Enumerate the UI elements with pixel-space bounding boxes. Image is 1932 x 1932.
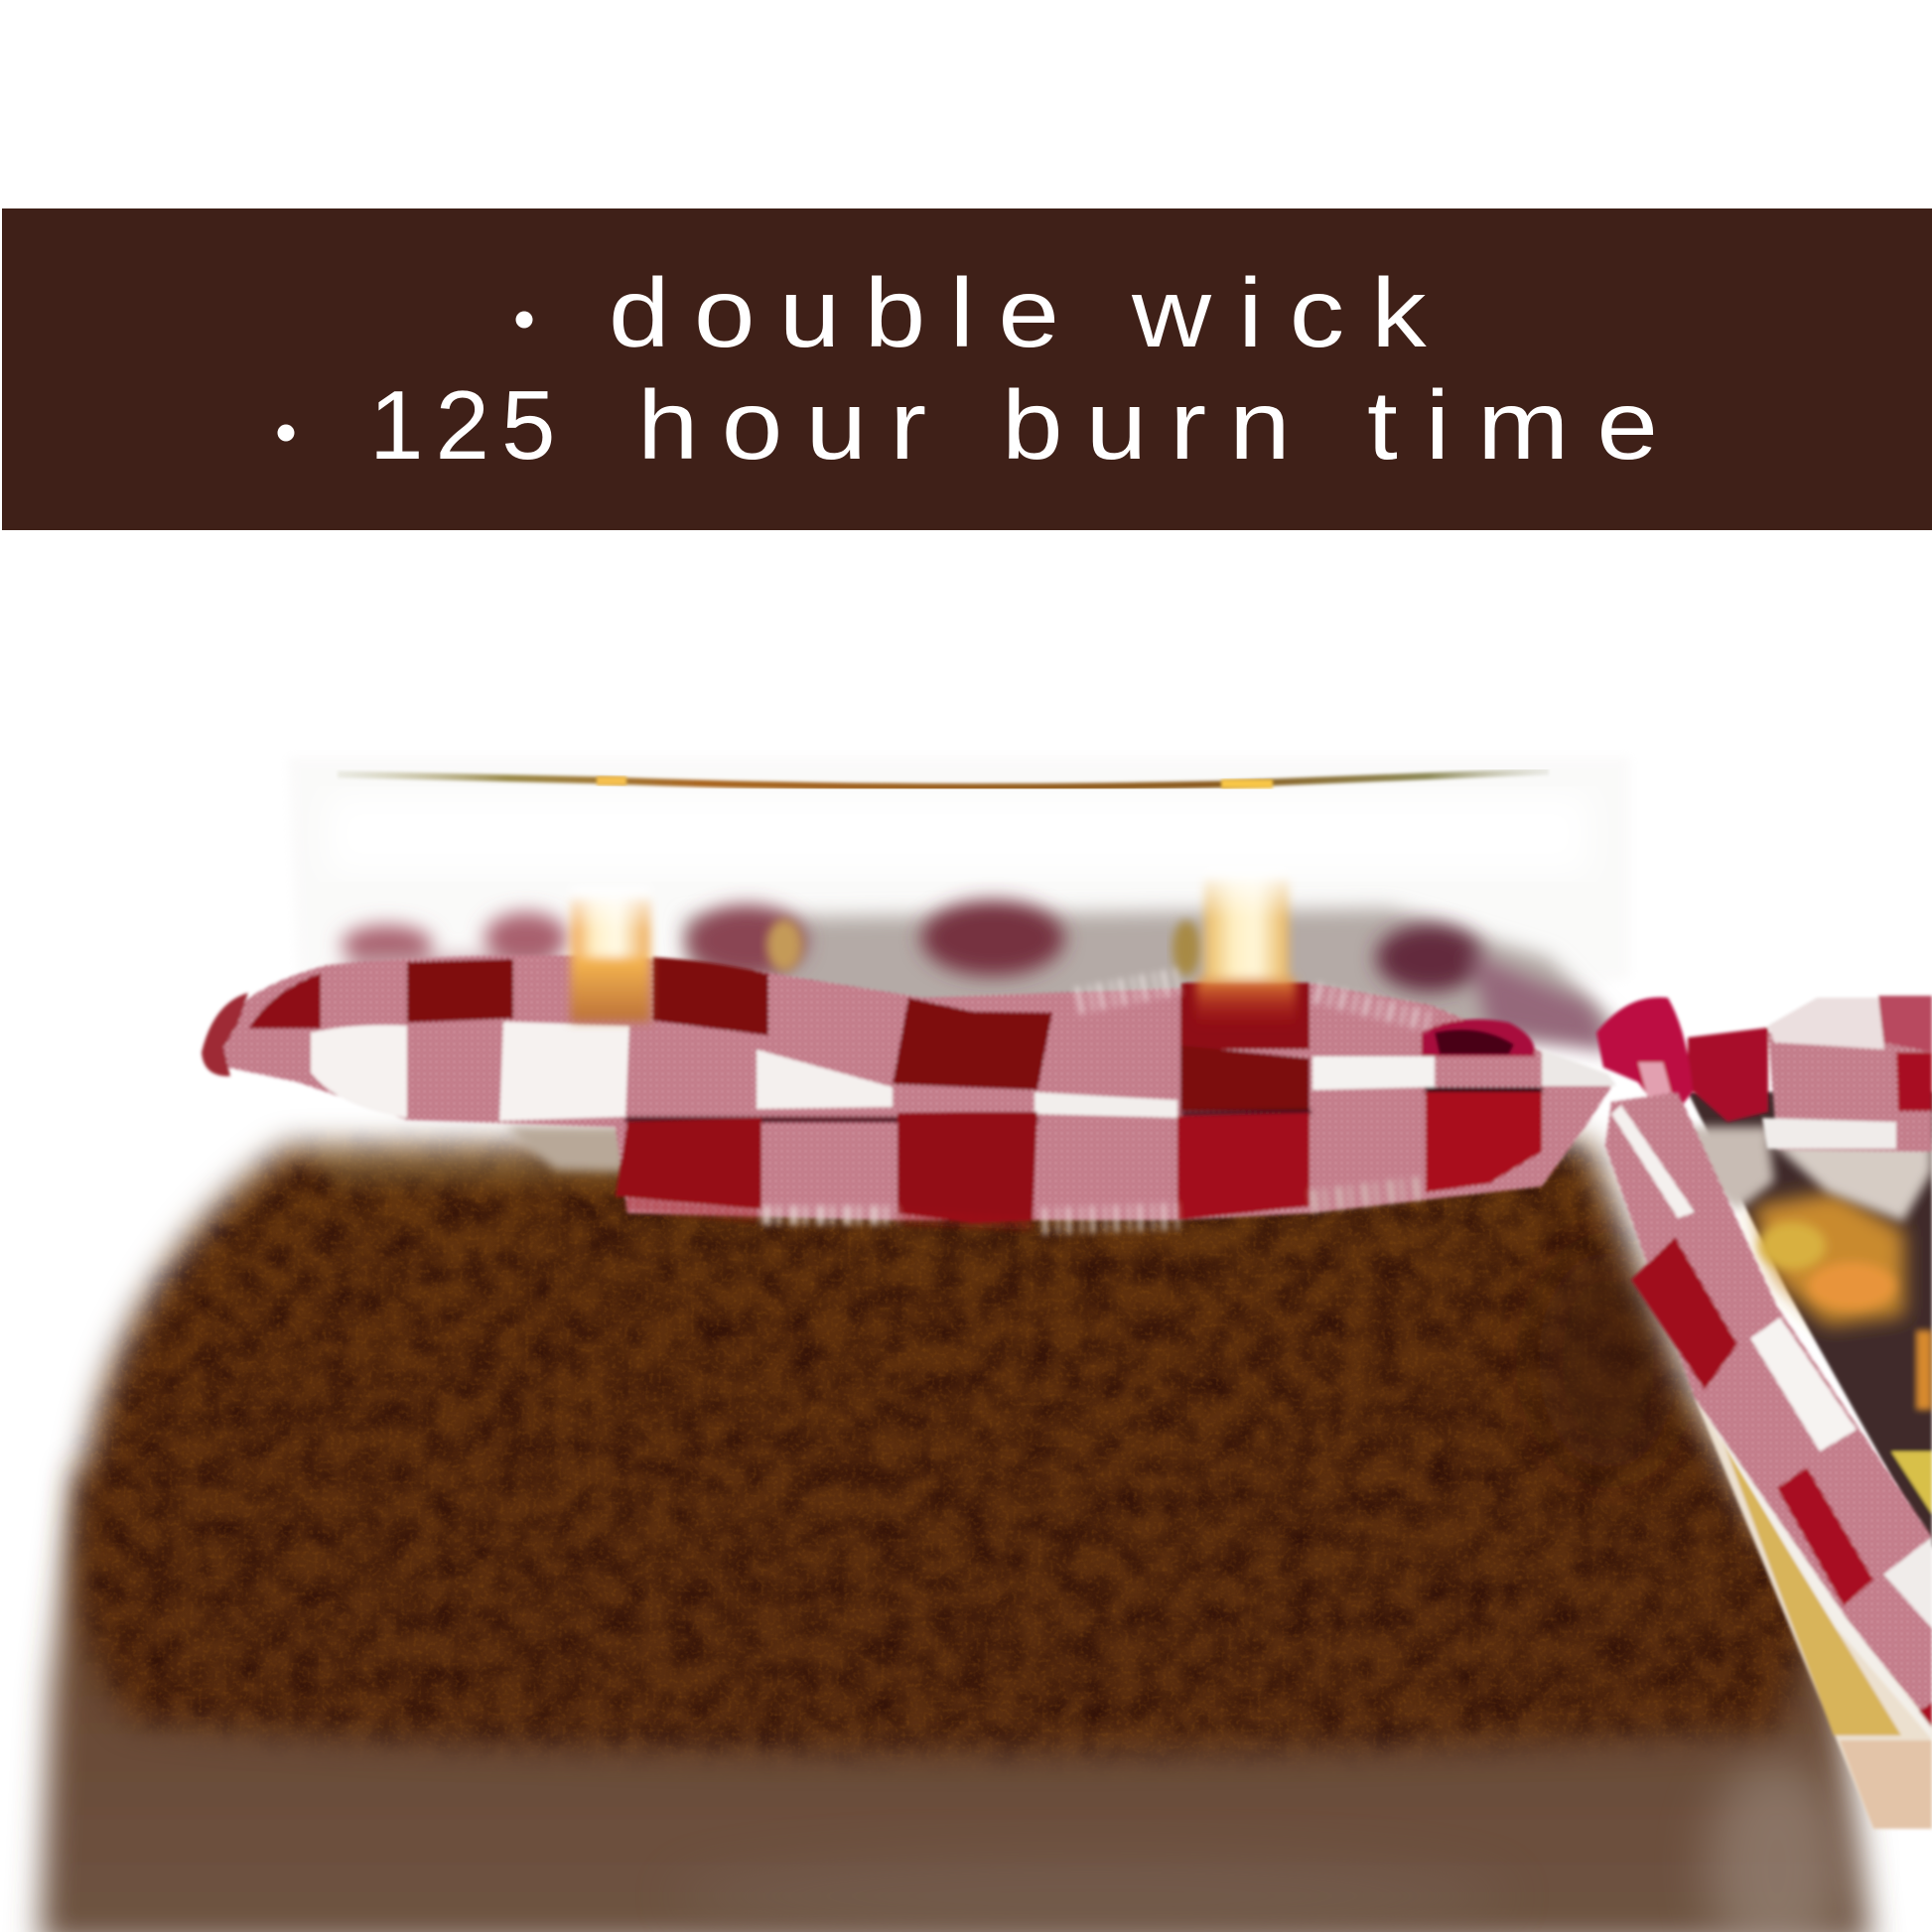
rim flame reflections — [597, 776, 1273, 788]
flame left — [571, 886, 650, 1022]
wax surface seen through glass — [318, 900, 1628, 1052]
tag artwork — [1681, 1127, 1932, 1514]
candle flames — [571, 869, 1296, 1028]
ribbon tail — [1605, 1092, 1932, 1739]
frayed fringe — [627, 981, 1435, 1223]
heading band — [2, 208, 1932, 530]
middle row white checks — [311, 1022, 1616, 1121]
glass jar neck — [288, 757, 1630, 993]
jar lower glass — [40, 1469, 1871, 1932]
ribbon base — [204, 955, 1614, 1220]
feature: double wick: wick — [1131, 259, 1453, 368]
pale wax patch under ribbon — [506, 1128, 625, 1172]
feature: 125 hour burn time: 125 — [369, 370, 568, 480]
ribbon fold shadows — [625, 1090, 1542, 1120]
feature: double wick — [516, 259, 1453, 368]
top row checks — [249, 957, 1535, 1111]
feature: 125 hour burn time: hour — [637, 371, 949, 481]
candle jar photo — [0, 757, 1932, 1932]
bow knot and right loop — [1596, 996, 1932, 1152]
wax body — [51, 1119, 1809, 1769]
lower row checks — [616, 1092, 1542, 1223]
feature: 125 hour burn time: burn — [1002, 371, 1313, 481]
gingham ribbon around neck — [202, 955, 1616, 1223]
feature: 125 hour burn time: time — [1367, 371, 1686, 481]
flame right — [1196, 869, 1296, 1028]
feature: double wick: double — [609, 259, 1083, 368]
feature: 125 hour burn time — [278, 370, 1686, 481]
knotted end — [202, 993, 248, 1076]
hang tag behind ribbon tail — [1681, 1092, 1932, 1829]
